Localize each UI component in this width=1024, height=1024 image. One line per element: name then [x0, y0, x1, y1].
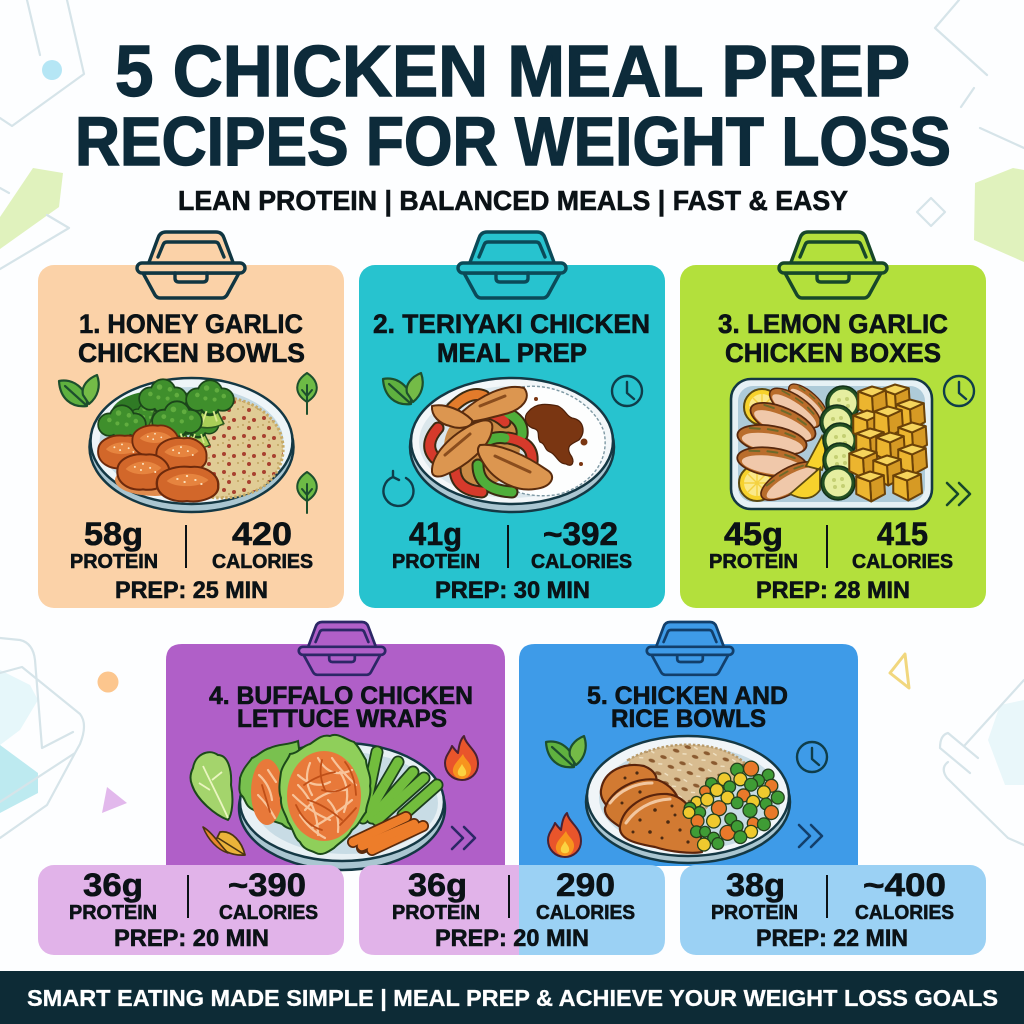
heading 3: CHICKEN BOXES: [725, 338, 941, 368]
icon: meal prep box 1: [137, 232, 245, 298]
stats 2: 41g: [409, 516, 462, 552]
heading 5: [587, 682, 788, 733]
panel: recipe 3 lemon garlic chicken boxes: [680, 232, 986, 608]
icon: meal prep box 4: [299, 622, 385, 675]
stats 3: [709, 516, 953, 604]
stats panel: recipe 4: PREP: 20 MIN: [114, 925, 269, 952]
icon: leaf bottom: [297, 472, 317, 513]
heading 2: [373, 309, 650, 368]
stats 3: 45g: [724, 516, 783, 552]
stats 2: PROTEIN: [392, 551, 480, 573]
icon: leaves: [546, 736, 586, 767]
illustration: teriyaki plate: [410, 378, 614, 512]
icon: flame: [548, 813, 581, 857]
stats panel: recipe 5: 36g: [408, 867, 467, 903]
card background 4: [166, 644, 505, 866]
stats panel: recipe 4: ~390: [228, 867, 306, 903]
stats panel: extra recipe: 38g: [726, 867, 785, 903]
card background 1: [38, 265, 344, 608]
stats 2: PREP: 30 MIN: [435, 577, 590, 604]
stats panel: recipe 4: [38, 865, 344, 955]
stats panel: recipe 5: CALORIES: [536, 902, 635, 924]
icon: leaves: [383, 373, 423, 404]
stats panel: recipe 4: 36g: [83, 867, 143, 903]
stats 3: CALORIES: [852, 551, 953, 573]
stats panel: recipe 5: PREP: 20 MIN: [435, 925, 589, 952]
stats 1: PREP: 25 MIN: [115, 577, 268, 604]
subtitle: LEAN PROTEIN | BALANCED MEALS | FAST & EASY: [178, 185, 848, 216]
card background 3: [680, 265, 986, 608]
stats panel: recipe 4: PROTEIN: [69, 902, 157, 924]
icon: lettuce leaf: [190, 752, 232, 820]
icon: refresh arrow: [383, 471, 413, 506]
heading 1: 1. HONEY GARLIC: [79, 309, 303, 339]
heading 5: RICE BOWLS: [611, 705, 766, 733]
icon: meal prep box 2: [458, 232, 566, 298]
panel: recipe 4 buffalo chicken lettuce wraps: [166, 622, 505, 870]
stats panel: extra recipe: PROTEIN: [711, 902, 798, 924]
footer banner: [0, 971, 1024, 1024]
stats 1: CALORIES: [212, 551, 313, 573]
stats panel: recipe 4: CALORIES: [219, 902, 318, 924]
icon: leaf top: [297, 373, 317, 414]
illustration: honey garlic plate: [90, 378, 294, 512]
stats 1: 420: [232, 516, 292, 552]
icon: meal prep box 3: [779, 232, 887, 298]
icon: chevrons: [947, 483, 970, 505]
icon: leaves: [59, 375, 99, 406]
icon: chevrons: [799, 825, 822, 847]
heading 5: 5. CHICKEN AND: [587, 682, 788, 710]
title: [75, 32, 951, 180]
stats 3: PROTEIN: [709, 551, 798, 573]
panel: recipe 1 honey garlic chicken bowls: [38, 232, 344, 608]
stats panel: recipe 5: [359, 865, 665, 955]
title: RECIPES FOR WEIGHT LOSS: [75, 103, 951, 180]
heading 1: [78, 309, 305, 368]
card background 2: [359, 265, 665, 608]
icon: clock: [944, 376, 974, 406]
stats panel: extra recipe: PREP: 22 MIN: [756, 925, 908, 952]
stats panel: extra recipe: CALORIES: [855, 902, 954, 924]
icon: chevrons: [452, 827, 475, 849]
heading 3: [718, 309, 948, 368]
heading 4: [209, 682, 473, 733]
panel: recipe 2 teriyaki chicken meal prep: [359, 232, 665, 608]
footer banner: SMART EATING MADE SIMPLE | MEAL PREP & ACHIEVE YOUR WEIGHT LOSS GOALS: [27, 985, 998, 1011]
illustration: chicken and rice plate: [586, 736, 790, 863]
stats 1: 58g: [84, 516, 143, 552]
stats panel: extra recipe: ~400: [863, 867, 946, 903]
panel: recipe 5 chicken and rice bowls: [519, 622, 858, 866]
stats panel: extra recipe: [680, 865, 986, 955]
heading 2: 2. TERIYAKI CHICKEN: [373, 309, 650, 339]
illustration: lemon chicken tray: [731, 378, 932, 509]
stats 3: 415: [877, 516, 928, 552]
stats 2: [392, 516, 632, 604]
heading 3: 3. LEMON GARLIC: [718, 309, 948, 339]
stats 2: ~392: [543, 516, 618, 552]
stats 1: PROTEIN: [70, 551, 158, 573]
stats panel: recipe 5: 290: [556, 867, 615, 903]
title: 5 CHICKEN MEAL PREP: [115, 32, 910, 112]
icon: autumn leaf: [203, 827, 245, 855]
card background 5: [519, 644, 858, 866]
heading 1: CHICKEN BOWLS: [78, 338, 305, 368]
icon: clock: [797, 742, 827, 772]
heading 2: MEAL PREP: [437, 338, 587, 368]
stats 1: [70, 516, 313, 604]
heading 4: LETTUCE WRAPS: [237, 705, 447, 733]
heading 4: 4. BUFFALO CHICKEN: [209, 682, 473, 710]
icon: meal prep box 5: [647, 622, 733, 675]
illustration: lettuce wraps plate: [239, 735, 445, 870]
stats panel: recipe 5: PROTEIN: [392, 902, 480, 924]
icon: flame: [445, 736, 478, 780]
stats 3: PREP: 28 MIN: [756, 577, 910, 604]
stats 2: CALORIES: [531, 551, 632, 573]
icon: clock: [612, 376, 642, 406]
